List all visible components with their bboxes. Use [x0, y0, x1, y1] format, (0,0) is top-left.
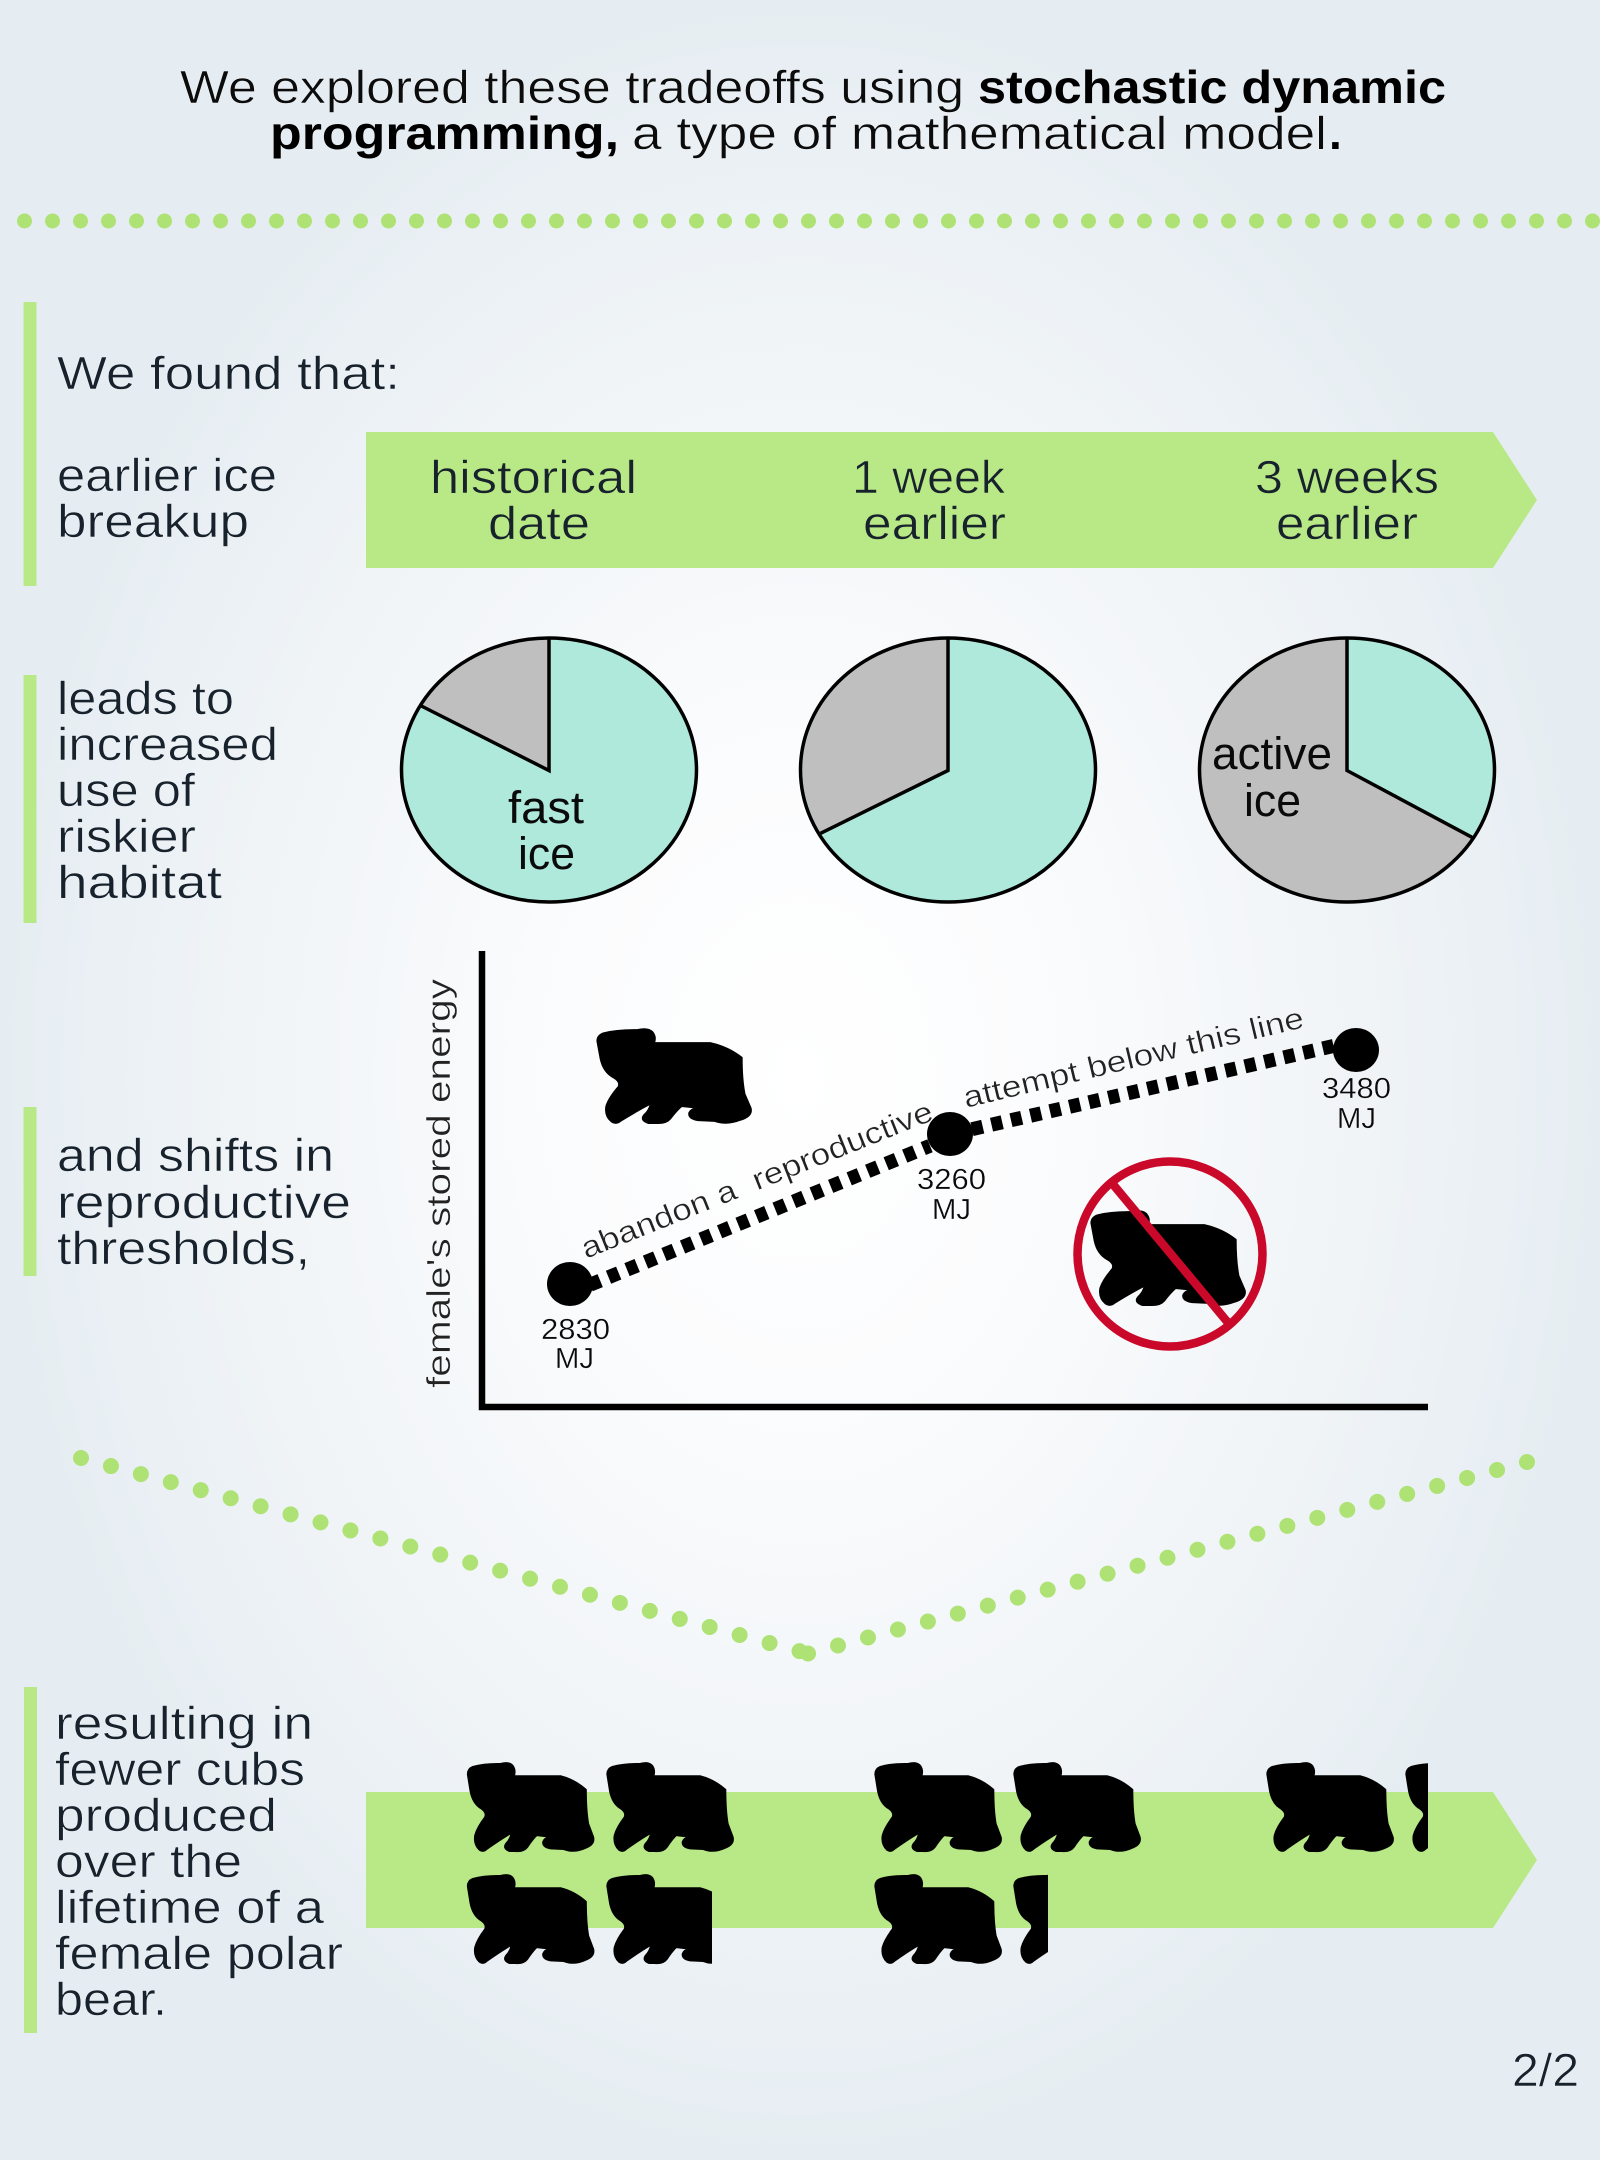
text: we found that: We found that: [57, 347, 400, 399]
text: resulting in fewer cubs [55, 1697, 343, 2025]
text: resulting in fewer cubs: bear. [55, 1973, 167, 2025]
arrow: cubs by date [366, 1792, 1537, 1928]
label: 1 week earlier: earlier [863, 497, 1006, 549]
label: active ice [1212, 728, 1332, 826]
data point: 3260 MJ [917, 1112, 986, 1226]
pie chart: historical date [402, 638, 696, 902]
axis label: female's stored energy: female's stored energy [420, 978, 457, 1388]
text: and shifts in reproductive thresholds: reproductive [57, 1176, 351, 1228]
threshold line [590, 1044, 1340, 1285]
title: stochastic dynamic [978, 61, 1446, 113]
title [180, 61, 1446, 159]
label: active ice: active [1212, 728, 1332, 779]
data point: 3480 MJ: MJ [1337, 1103, 1376, 1135]
section bar: we found that [24, 302, 36, 586]
data point: 2830 MJ [541, 1262, 610, 1375]
title: We explored these tradeoffs using [180, 61, 964, 113]
icon: no bear below threshold [1078, 1162, 1262, 1346]
text: resulting in fewer cubs: resulting in [55, 1697, 313, 1749]
title: . [1329, 107, 1342, 159]
text: earlier ice breakup: earlier ice [57, 449, 277, 501]
label: 3 weeks earlier [1255, 451, 1439, 549]
label: active ice: ice [1244, 775, 1301, 826]
line label: abandon a reproductive: abandon a reproductive [576, 1095, 938, 1265]
text: leads to increased use of riskier habitat: riskier [57, 810, 196, 862]
text: resulting in fewer cubs: over the [55, 1835, 242, 1887]
label: 3 weeks earlier: earlier [1276, 497, 1418, 549]
section bar: habitat [24, 675, 36, 923]
section bar: thresholds [24, 1107, 36, 1276]
label: 1 week earlier: 1 week [852, 451, 1006, 503]
label: fast ice: fast [508, 782, 585, 833]
data point: 3260 MJ: 3260 [917, 1164, 986, 1196]
icon: bear above threshold [598, 1029, 751, 1123]
text: leads to increased use of riskier habitat: leads to [57, 672, 234, 724]
title: a type of mathematical model [632, 107, 1327, 159]
text: and shifts in reproductive thresholds [57, 1129, 351, 1274]
label: 1 week earlier [852, 451, 1006, 549]
title: programming, [270, 107, 619, 159]
data point: 3480 MJ [1322, 1028, 1391, 1135]
cubs: 1 week earlier [875, 1763, 1140, 1963]
chart axes [482, 951, 1428, 1407]
text: and shifts in reproductive thresholds: and shifts in [57, 1129, 334, 1181]
text: earlier ice breakup [57, 449, 277, 547]
text: and shifts in reproductive thresholds: thresholds, [57, 1222, 310, 1274]
data point: 3260 MJ: MJ [932, 1194, 971, 1226]
label: historical date: historical [430, 451, 637, 503]
cubs: 3 weeks earlier [1266, 1762, 1428, 1852]
cubs: historical date [468, 1763, 733, 1963]
label: historical date: date [488, 497, 590, 549]
line label: attempt below this line: attempt below this line [960, 1002, 1307, 1115]
panel: riskier habitat [24, 638, 1494, 923]
label: fast ice: ice [518, 828, 575, 879]
page number: 2/2 [1512, 2044, 1579, 2096]
panel: reproductive thresholds [24, 951, 1428, 1407]
data point: 2830 MJ: MJ [555, 1343, 594, 1375]
data point: 2830 MJ: 2830 [541, 1314, 610, 1346]
text: earlier ice breakup: breakup [57, 495, 249, 547]
arrow: breakup dates [366, 432, 1537, 568]
label: fast ice [508, 782, 585, 879]
label: historical date [430, 451, 637, 549]
section bar: cubs [24, 1687, 37, 2033]
pie chart: 1 week earlier [800, 638, 1096, 902]
text: resulting in fewer cubs: lifetime of a [55, 1881, 324, 1933]
panel: fewer cubs [24, 1687, 1537, 2033]
text: leads to increased use of riskier habitat: habitat [57, 856, 222, 908]
text: leads to increased use of riskier habitat: increased [57, 718, 278, 770]
label: 3 weeks earlier: 3 weeks [1255, 451, 1439, 503]
text: leads to increased use of riskier habitat: use of [57, 764, 195, 816]
text: leads to increased use of riskier habitat [57, 672, 278, 908]
text: resulting in fewer cubs: female polar [55, 1927, 343, 1979]
data point: 3480 MJ: 3480 [1322, 1073, 1391, 1105]
panel: ice breakup timing [24, 302, 1537, 586]
pie chart: 3 weeks earlier [1200, 638, 1494, 902]
text: resulting in fewer cubs: produced [55, 1789, 277, 1841]
text: resulting in fewer cubs: fewer cubs [55, 1743, 305, 1795]
